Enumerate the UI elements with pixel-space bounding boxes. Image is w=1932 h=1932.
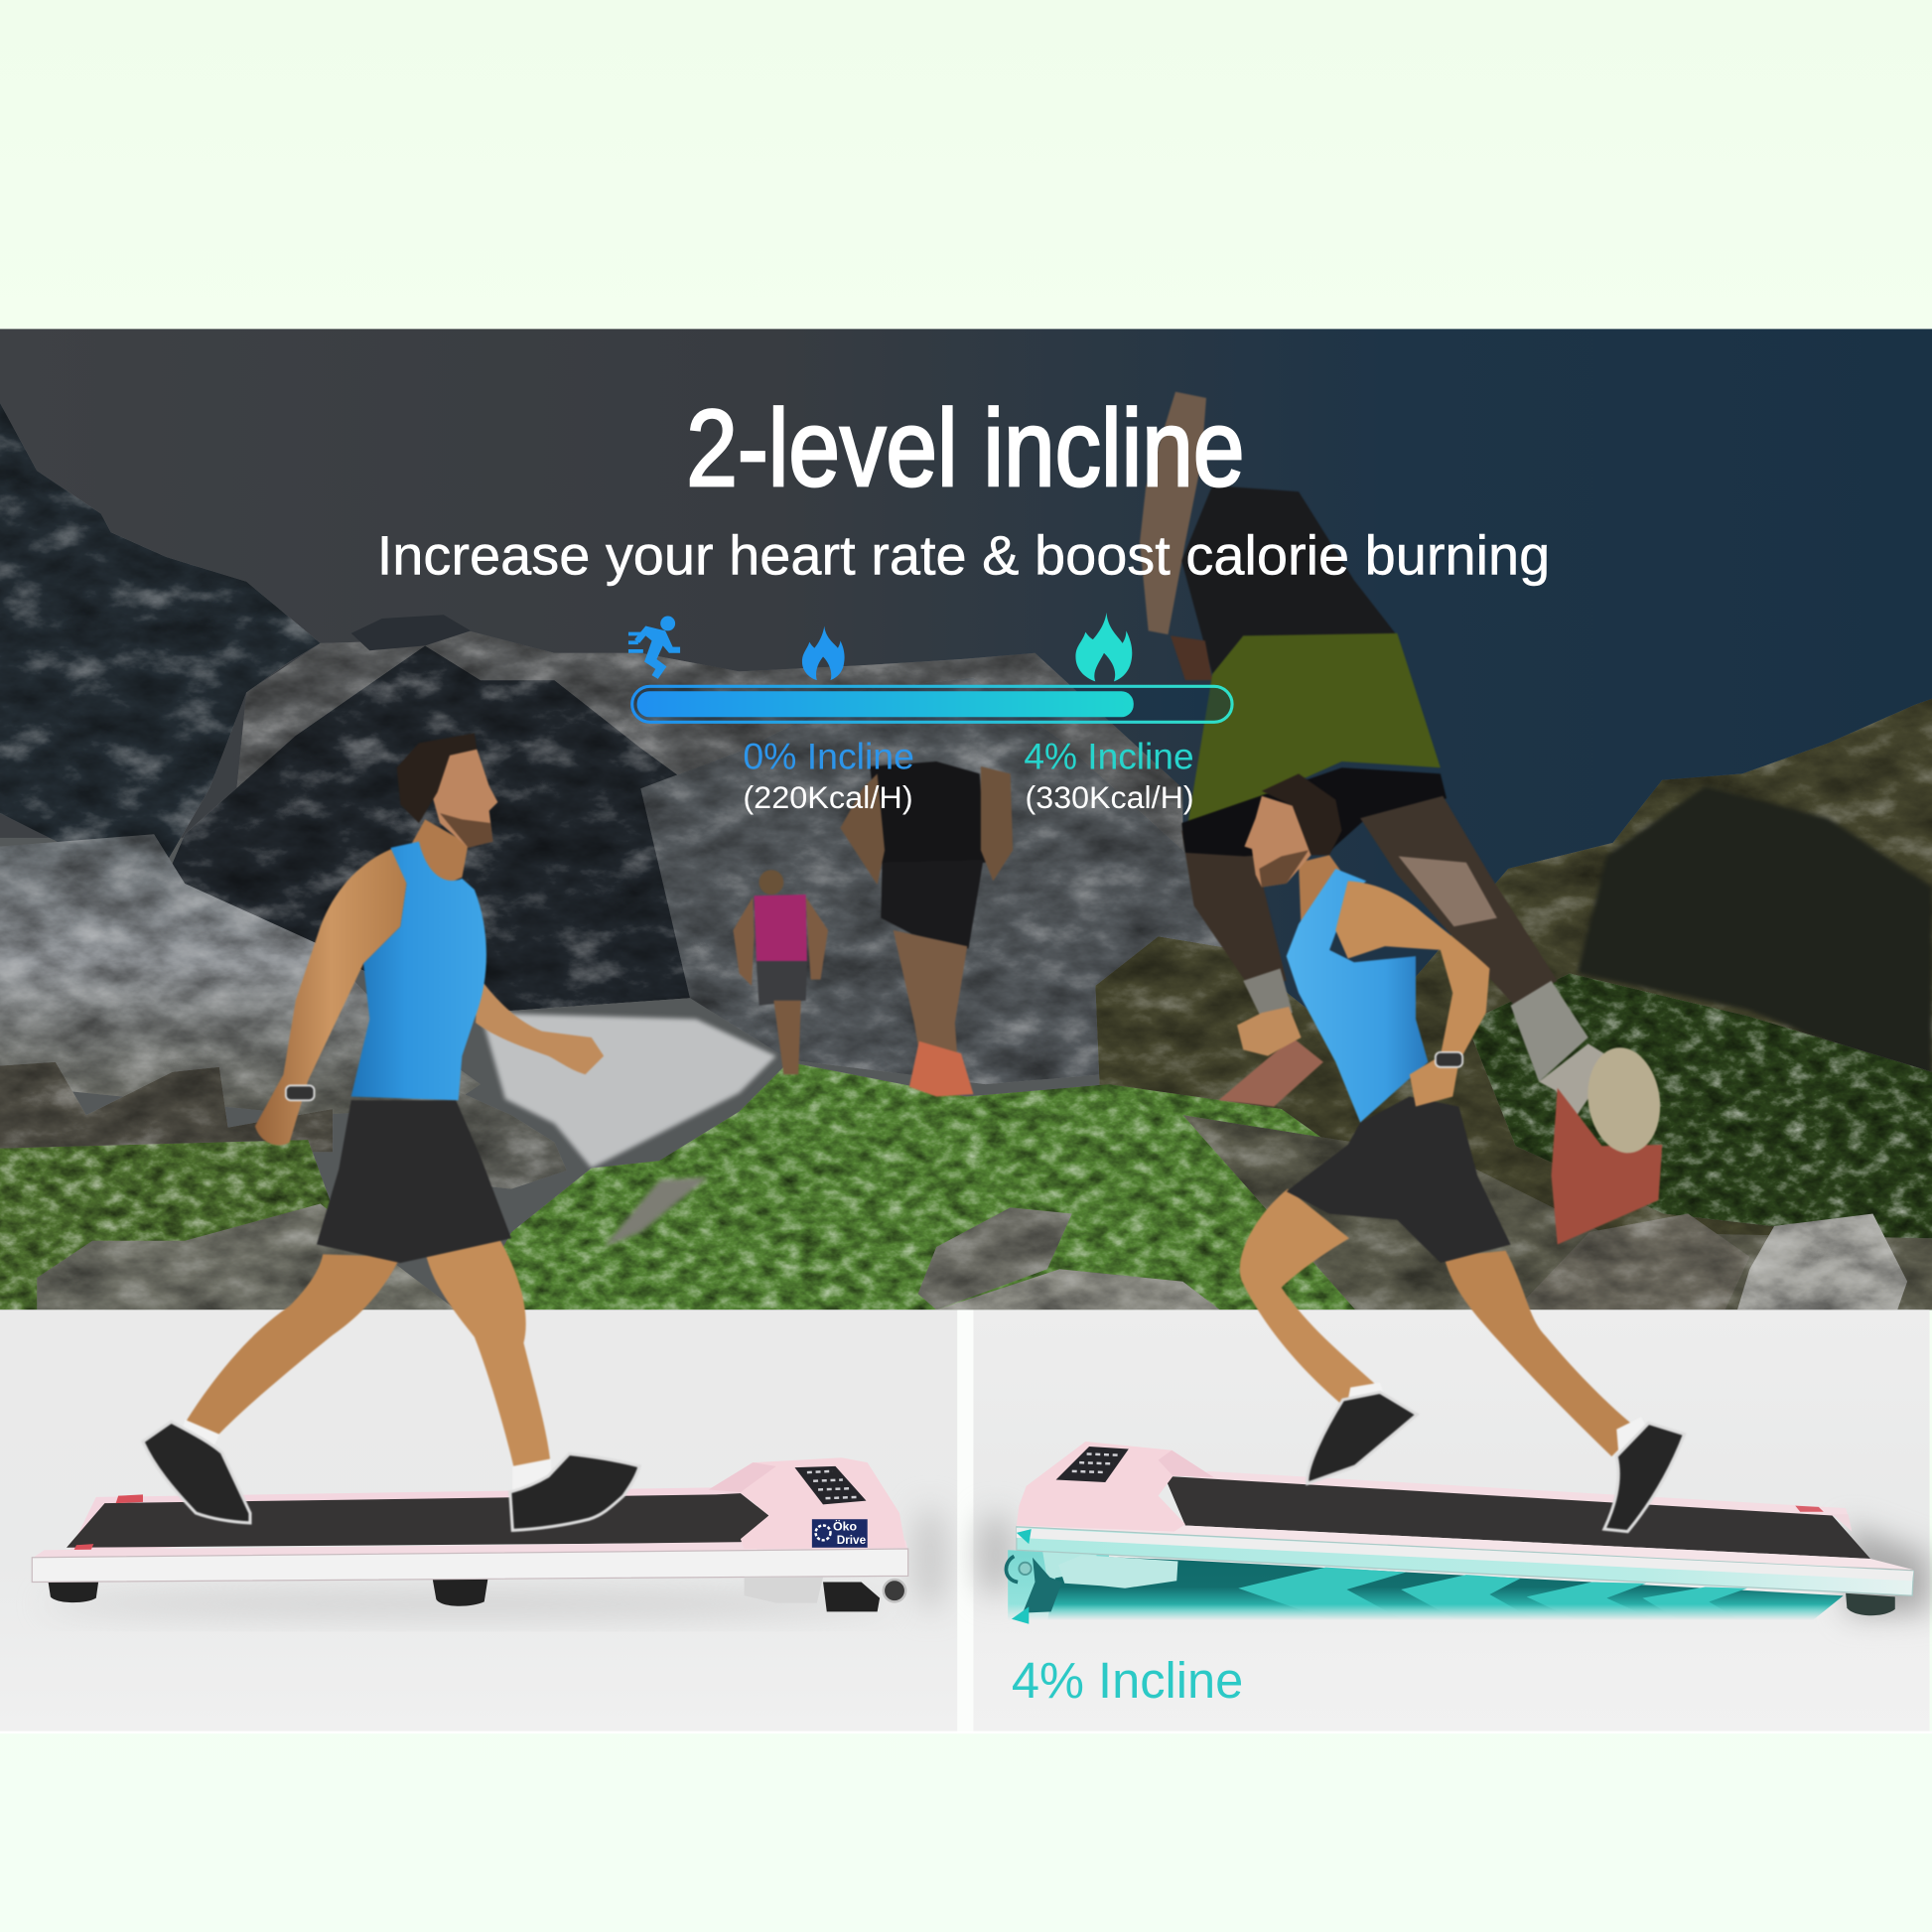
console ramp — [709, 1462, 776, 1492]
right foreground terrain — [1182, 1115, 1932, 1310]
pink rail top — [1182, 1471, 1849, 1517]
background runner: small, pink top — [733, 870, 828, 1074]
back shoe — [1604, 1423, 1685, 1532]
socks — [1345, 1382, 1649, 1458]
title: 2-level incline — [686, 388, 1244, 509]
tan snow band behind peaks — [221, 630, 1182, 986]
hand — [1171, 635, 1212, 680]
frame body — [1017, 1527, 1913, 1595]
black shirt — [1181, 485, 1397, 674]
left boulders — [0, 1062, 333, 1152]
right dark hill — [1095, 699, 1932, 1310]
rock base under the valley — [0, 838, 1282, 1310]
console screen — [794, 1466, 866, 1504]
neck — [407, 819, 469, 890]
hair — [397, 733, 477, 823]
left snow field — [0, 834, 481, 1115]
rear foot — [1846, 1593, 1895, 1615]
feet — [48, 1579, 487, 1606]
icon: running figure — [628, 617, 680, 679]
frozen lake — [481, 1013, 776, 1169]
motor housing — [745, 1578, 823, 1603]
socks — [180, 1420, 552, 1493]
second shoe — [1218, 1037, 1323, 1106]
rocky face behind runners — [640, 678, 1282, 1084]
floor shadow — [43, 1591, 894, 1616]
left grass — [0, 1140, 369, 1310]
panel gap — [957, 1310, 973, 1733]
background runner: medium, black outfit — [840, 761, 1013, 1097]
rear wheel — [1006, 1556, 1018, 1583]
foreground rocks — [37, 1204, 456, 1310]
pink side rail — [1017, 1525, 1913, 1570]
compression shorts — [1181, 767, 1447, 857]
background runner: giant foreground — [1140, 392, 1667, 1244]
panel: mountain scene — [0, 329, 1932, 1310]
dark wedge body — [1047, 1555, 1844, 1621]
pale bracket — [1042, 1550, 1097, 1580]
central grass — [469, 1062, 1553, 1310]
treadmill: flat position — [32, 1457, 908, 1611]
logo badge: Drive — [837, 1534, 867, 1547]
right grass — [1466, 973, 1932, 1244]
wheel hub — [1019, 1563, 1032, 1575]
progress bar — [632, 686, 1232, 722]
label: 4% incline — [1024, 735, 1194, 815]
runner on inclined treadmill — [1237, 773, 1685, 1532]
hair — [1262, 773, 1342, 855]
left side shadow — [978, 1513, 1013, 1596]
teal chevrons — [1239, 1567, 1747, 1608]
label: 4% incline: (330Kcal/H) — [1026, 780, 1194, 815]
incline marker arrows — [1012, 1529, 1032, 1624]
front shoe — [510, 1453, 639, 1530]
pink console — [1017, 1442, 1213, 1532]
neck — [1299, 855, 1348, 949]
face — [431, 750, 497, 848]
wheel — [884, 1580, 905, 1601]
left pale wash — [1008, 1550, 1109, 1621]
far arm — [1237, 1007, 1302, 1056]
watch — [286, 1085, 314, 1100]
rear end post — [1832, 1514, 1852, 1532]
console screen — [1056, 1447, 1129, 1482]
front shoe — [1308, 1392, 1417, 1483]
shoe sole — [1582, 1042, 1667, 1158]
rear shoe — [143, 1422, 250, 1523]
blue tank top — [351, 842, 486, 1100]
panel: right incline platform — [973, 1310, 1930, 1731]
right side shadow — [1849, 1525, 1930, 1614]
near leg — [425, 1238, 551, 1472]
label: 4% incline: 4% Incline — [1024, 735, 1194, 776]
side shadow — [913, 1507, 947, 1610]
label: 0% incline: 0% Incline — [743, 735, 914, 776]
rock behind walker — [456, 1090, 567, 1189]
raised forearm — [1140, 392, 1206, 634]
beard — [440, 813, 492, 848]
motor housing — [1058, 1555, 1177, 1588]
near arm — [1335, 881, 1489, 1106]
sock — [1511, 981, 1588, 1082]
left dark mountain — [0, 403, 321, 863]
back leg — [1445, 1251, 1639, 1456]
beard — [1259, 850, 1309, 888]
near arm — [255, 848, 407, 1145]
label: 0% incline — [743, 735, 914, 815]
walker on flat treadmill — [143, 733, 639, 1530]
pink side rail — [34, 1540, 908, 1558]
console ramp — [1159, 1450, 1213, 1477]
right dark rock mass — [1578, 786, 1932, 1084]
panel: left walking platform — [0, 1310, 957, 1731]
front leg strut — [1023, 1558, 1062, 1613]
distant dark crest — [351, 615, 471, 650]
thigh and calf — [1360, 796, 1558, 1006]
face — [1244, 796, 1311, 888]
treadmill: inclined position — [1006, 1442, 1913, 1624]
red end caps — [1795, 1506, 1880, 1568]
infographic canvas — [0, 329, 1932, 1733]
shorts — [1287, 1097, 1511, 1263]
icon: large teal flame — [1075, 613, 1132, 681]
subtitle: Increase your heart rate & boost calorie burning — [377, 523, 1550, 586]
second sock — [1243, 968, 1293, 1019]
olive shorts — [1187, 633, 1441, 824]
teal wedge with chevrons — [1008, 1550, 1844, 1621]
calf highlight — [1399, 857, 1497, 926]
red shoe upper — [1552, 1088, 1662, 1244]
label: 0% incline: (220Kcal/H) — [743, 780, 913, 815]
watch — [1436, 1052, 1462, 1067]
caption: 4% incline: 4% Incline — [1012, 1652, 1243, 1709]
logo badge — [812, 1518, 868, 1548]
logo badge: Öko — [833, 1518, 858, 1533]
black bracket — [823, 1583, 880, 1611]
second leg — [1181, 830, 1287, 987]
blue tank top — [1287, 869, 1428, 1123]
red end caps — [71, 1494, 143, 1555]
far leg — [185, 1254, 400, 1442]
icon: small blue flame — [802, 625, 845, 680]
pink rail back — [68, 1487, 755, 1555]
near leg — [1240, 1189, 1378, 1411]
far arm — [476, 976, 604, 1074]
white frame — [32, 1549, 908, 1583]
panel bottom edge — [0, 1731, 1932, 1733]
running belt — [67, 1493, 768, 1548]
pink console — [709, 1457, 905, 1549]
central dark massif — [167, 645, 788, 1035]
running belt — [1165, 1476, 1870, 1559]
shorts — [317, 1100, 511, 1263]
frame white strip — [1017, 1528, 1913, 1581]
heel — [1539, 1043, 1614, 1115]
